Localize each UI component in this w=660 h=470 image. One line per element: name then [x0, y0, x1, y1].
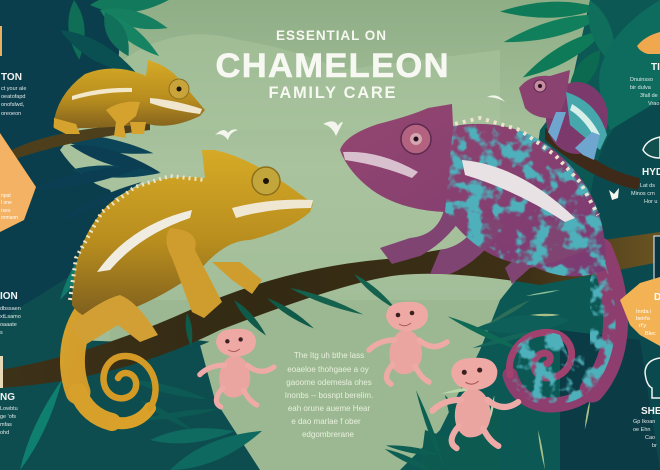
right panel: temperature: bir dulva — [630, 85, 652, 91]
center description text: e dao marlae f ober — [291, 417, 361, 426]
left panel: orange hexagon: ormaon — [1, 215, 18, 221]
left panel: orange hexagon: l one — [1, 200, 12, 206]
center description text: edgombrerane — [302, 430, 355, 439]
upper-left twig — [12, 122, 150, 160]
right panel: shelter: Cao — [645, 435, 655, 441]
main branch — [0, 232, 660, 388]
large golden chameleon — [70, 150, 313, 423]
right panel: temperature: Dnuinsso — [630, 77, 653, 83]
center description text: eah orune aueme Hear — [288, 404, 370, 413]
right panel: temperature: Vrao — [648, 101, 659, 107]
title: FAMILY CARE — [268, 84, 396, 102]
small golden chameleon — [53, 60, 205, 138]
right panel: hydration — [631, 137, 660, 205]
left jungle foliage — [0, 0, 266, 470]
left panel: hydration: dbssaen — [0, 306, 21, 312]
right panel: shelter: oe Ehn — [633, 427, 650, 433]
left panel: handling: Lowbtu — [0, 406, 18, 412]
left panel: handling: mfas — [0, 422, 12, 428]
right panel: hydration: Minos crn — [631, 191, 655, 197]
center description text: Inonbs -- bosnpt berelim. — [285, 391, 373, 400]
left panel: hydration: s — [0, 330, 3, 336]
right panel: shelter — [633, 358, 660, 449]
left panel: nutrition: ct your ale — [1, 86, 26, 92]
left panel: orange hexagon — [0, 133, 36, 232]
right panel: orange hexagon: rt'y — [639, 323, 646, 329]
left panel: nutrition: onofslwd, — [1, 102, 25, 108]
left panel: hydration: oaaate — [0, 322, 17, 328]
small teal chameleon — [519, 70, 608, 160]
center description text — [285, 351, 373, 439]
left panel: nutrition: oreoeon — [1, 111, 21, 117]
title: ESSENTIAL ON — [276, 28, 386, 43]
right panel: orange hexagon: Inrda i — [636, 309, 651, 315]
right panel: temperature: TI — [651, 62, 660, 73]
left panel: orange hexagon: rses — [1, 208, 11, 214]
right panel: shelter: Gp Ikoan — [633, 419, 655, 425]
baby chameleon right — [432, 358, 518, 448]
upper-right twig — [545, 128, 640, 190]
birds — [215, 95, 619, 200]
right panel: orange hexagon: Blec — [645, 331, 656, 337]
left panel: handling: NG — [0, 392, 15, 403]
hanging branch leaves — [184, 272, 398, 347]
left panel: handling — [0, 356, 18, 436]
left panel: handling: ge 'ofs — [0, 414, 16, 420]
title: CHAMELEON — [216, 47, 448, 85]
right panel: shelter: br — [652, 443, 657, 449]
right panel: icon box — [654, 236, 660, 282]
left panel: nutrition — [0, 26, 26, 117]
center description text: eoaeloe thohgaee a oy — [287, 365, 369, 374]
left panel: nutrition: oeatofapd — [1, 94, 25, 100]
left panel: orange hexagon: npat — [1, 193, 11, 199]
large purple chameleon — [340, 104, 616, 405]
right panel: orange hexagon — [620, 277, 660, 346]
left panel: hydration — [0, 291, 21, 336]
right panel: orange hexagon: beirfa — [636, 316, 651, 322]
right panel: temperature: 3fall de — [640, 93, 658, 99]
title — [216, 28, 448, 102]
baby chameleon left — [200, 329, 274, 407]
left panel: hydration: xtLsamo — [0, 314, 21, 320]
right panel: hydration: Lat ds — [640, 183, 655, 189]
baby chameleon center — [369, 302, 447, 384]
center description text: gaoome odemesla ohes — [286, 378, 372, 387]
right panel: hydration: Hor u — [644, 199, 657, 205]
left panel: hydration: ION — [0, 291, 18, 302]
left panel: nutrition: TON — [1, 72, 22, 83]
center description text: The Itg uh bthe lass — [294, 351, 364, 360]
left panel: handling: ohd — [0, 430, 9, 436]
right jungle foliage — [383, 0, 660, 470]
right panel: temperature — [630, 32, 660, 107]
